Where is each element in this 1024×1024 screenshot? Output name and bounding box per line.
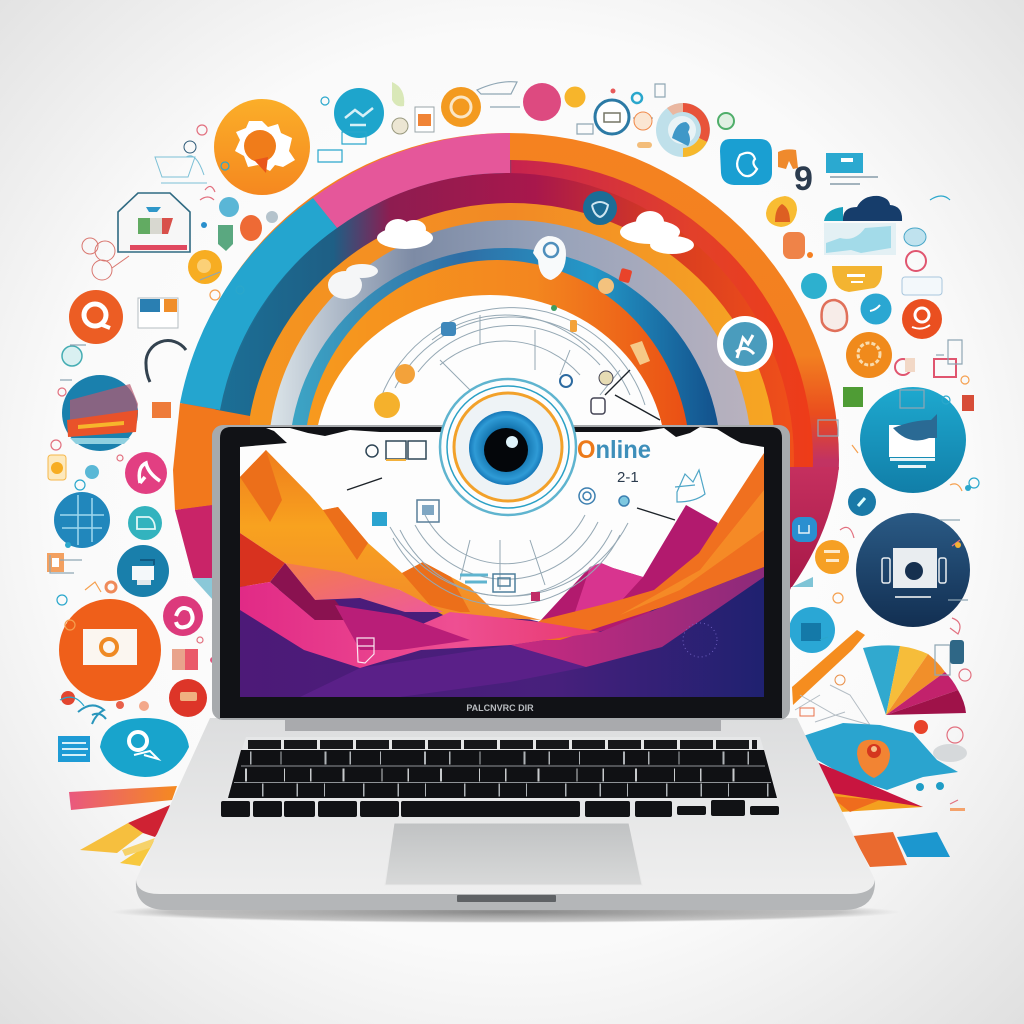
colourful paper strands xyxy=(812,760,923,812)
icon: navy camera badge xyxy=(856,513,970,627)
icon: orange figure xyxy=(766,196,797,227)
icon: yellow small badge xyxy=(564,86,586,108)
icon: orange gear badge xyxy=(846,332,892,378)
icon: orange ring small xyxy=(106,582,116,592)
band: orange right xyxy=(538,453,764,640)
card: cloud and landscape xyxy=(824,196,902,255)
orange paper card xyxy=(853,832,907,867)
icon: yellow small tag xyxy=(48,455,66,480)
band: pink main xyxy=(240,582,600,668)
ring: orange band xyxy=(250,203,774,425)
icon: teal badge xyxy=(128,506,162,540)
icon: pink outline loop xyxy=(822,300,847,331)
ring: inner orange band xyxy=(307,260,687,425)
note: numeric scribble: 2-1 xyxy=(617,469,639,486)
band: light orange right xyxy=(620,490,764,615)
radar: concentric arcs xyxy=(380,308,645,605)
badge: white speech bubble xyxy=(533,236,566,280)
icon: blue rounded badge xyxy=(720,139,772,185)
icon: small document stack xyxy=(172,649,198,670)
icon: pink ring badges xyxy=(895,251,956,377)
radar: dark leader lines xyxy=(347,370,675,520)
icon: open ring xyxy=(146,341,186,382)
blue paper card xyxy=(897,832,950,857)
laptop: keyboard deck xyxy=(136,718,875,894)
card: blue screen xyxy=(826,153,878,184)
ring segment: lower left teal tip xyxy=(193,578,213,600)
ring: outer orange band xyxy=(180,133,839,590)
laptop: front notch xyxy=(457,895,556,902)
icon: red chat badge left xyxy=(69,290,123,344)
laptop: screen bezel xyxy=(220,427,782,718)
icon: large orange mail badge xyxy=(59,599,161,701)
icon: large teal monitor badge xyxy=(860,387,966,493)
badge: teal lens xyxy=(717,316,773,372)
band: magenta shade xyxy=(335,605,470,650)
mountain: pink right peak xyxy=(575,563,643,612)
laptop: hinge xyxy=(285,720,721,731)
sketch: crown icon xyxy=(675,470,705,502)
icon: pale card xyxy=(902,277,942,295)
ring segment: pink xyxy=(313,133,510,228)
icon: pink swirl badge xyxy=(163,596,203,636)
marker: red tag xyxy=(618,268,632,283)
icon: green shield xyxy=(218,225,233,251)
icon: teal chat badge xyxy=(334,88,384,138)
sketch: blue desk drawing xyxy=(155,141,207,183)
clouds and floating ring badges xyxy=(328,191,773,372)
small scattered icons xyxy=(50,82,979,804)
icon: orange frame square xyxy=(47,553,64,572)
laptop: keyboard xyxy=(219,737,784,818)
small filled dots and tags xyxy=(65,82,974,811)
dots: stars on navy xyxy=(683,623,717,657)
icon: orange ring badge xyxy=(441,87,481,127)
ring: grey band xyxy=(270,220,750,425)
radar grid and eye xyxy=(347,305,705,605)
laptop: base underside xyxy=(136,880,875,910)
icon: teal ring small xyxy=(632,93,642,103)
ring segment: right teal tip xyxy=(792,577,813,587)
sketch: red circles xyxy=(82,238,129,280)
icon: blue small badge xyxy=(848,488,876,516)
icon: teal shield xyxy=(801,273,827,299)
band: pink purple lower right xyxy=(511,567,764,667)
paper: yellow sheets xyxy=(80,823,155,866)
icon: teal ring small xyxy=(62,346,82,366)
brush stroke: orange xyxy=(792,630,865,705)
laptop xyxy=(110,425,900,923)
cloud: lower left xyxy=(328,264,378,299)
band: salmon ridge xyxy=(285,563,443,612)
icons: orange fruit xyxy=(374,364,415,418)
sketch: white box on mountain xyxy=(357,638,374,663)
paper: red triangle xyxy=(128,805,170,837)
icon: red target badge xyxy=(902,299,942,339)
eye: iris xyxy=(469,411,543,485)
laptop: brand label: PALCNVRC DIR xyxy=(466,703,534,713)
icon: blue card on paper xyxy=(372,500,439,526)
icon: blue squiggle xyxy=(78,705,106,724)
icon: blue globe badge xyxy=(54,492,110,548)
icon: red small badge xyxy=(61,691,75,705)
eye: blue ring xyxy=(447,386,569,508)
icon: teal dot badge xyxy=(860,294,892,324)
cloud: right xyxy=(620,211,694,254)
mountain: left orange range xyxy=(240,450,541,620)
icon: colourful donut badge xyxy=(656,103,710,157)
ring segment: lower left crimson xyxy=(175,505,213,578)
icon: blue flag card xyxy=(58,736,90,762)
icon: yellow sun xyxy=(188,250,222,284)
paper strip: pink orange xyxy=(69,786,177,810)
ring: white dome xyxy=(318,295,662,425)
ring: dark blue to crimson band xyxy=(284,173,794,467)
marker: cream ball xyxy=(598,278,614,294)
blue splash xyxy=(800,723,958,790)
band: deep purple facet xyxy=(300,645,586,697)
sketch lines near pie xyxy=(795,675,870,725)
icon: green swirl small xyxy=(718,113,734,129)
icon: colour card xyxy=(138,298,178,328)
cloud: left xyxy=(377,219,433,249)
icon: sunset landscape badge xyxy=(62,375,138,451)
ring segment: lower right crimson xyxy=(785,467,839,587)
screen: purple base xyxy=(240,560,764,700)
marker: crimson square xyxy=(531,592,540,601)
icon: orange small square xyxy=(152,402,171,418)
word: Online: Online xyxy=(577,436,651,464)
icon: teal small circle xyxy=(85,465,99,479)
torn white paper edge xyxy=(240,427,764,450)
icon: red pill badge xyxy=(169,679,207,717)
icon: large teal chat badge xyxy=(100,718,189,777)
ring segment: lower left orange xyxy=(173,403,250,510)
grey smudge xyxy=(933,744,967,762)
pie chart xyxy=(863,645,966,715)
ring: crimson inner band xyxy=(215,160,813,467)
icon: blue shield on ring xyxy=(792,517,817,542)
laptop: drop shadow xyxy=(110,901,900,923)
concentric rainbow rings xyxy=(180,133,839,590)
eye: orange ring xyxy=(454,393,562,501)
icon: orange menu badge xyxy=(815,540,849,574)
laptop: screen frame xyxy=(212,425,790,720)
icon: blue outline badge xyxy=(595,100,629,134)
icon: orange shield xyxy=(240,215,262,241)
icon: pink dot badge xyxy=(523,83,561,121)
ring segment: blue xyxy=(180,198,337,410)
icon: green card xyxy=(843,387,863,407)
icon: yellow speech card xyxy=(832,266,882,292)
eye: highlight xyxy=(506,436,518,448)
icon row: cards left of eye xyxy=(366,441,426,460)
icon: card at bottom of radar xyxy=(460,574,515,592)
icon: blue brain xyxy=(904,228,926,246)
icon: teal cube badge xyxy=(789,607,835,653)
ring: blue band xyxy=(292,248,718,425)
mountain: dark magenta right xyxy=(541,505,718,640)
icon: orange document xyxy=(783,232,805,259)
icon: blue badge xyxy=(219,197,239,217)
icon: document house card xyxy=(118,193,190,252)
mountain: dark orange facets xyxy=(240,450,470,612)
icon: orange sun badge xyxy=(214,99,310,195)
icon: orange tag xyxy=(778,149,798,169)
icon: spiral badge xyxy=(579,488,629,506)
icon: orange map pin xyxy=(857,740,890,778)
numeral nine: 9 xyxy=(794,160,813,198)
band: crimson shade xyxy=(270,563,350,620)
icons: small badges on arcs xyxy=(441,305,650,414)
icon: blue printer badge xyxy=(117,545,169,597)
laptop: trackpad xyxy=(385,823,642,885)
band: red left xyxy=(240,533,285,587)
laptop screen artwork xyxy=(240,440,764,700)
eye: pupil xyxy=(484,428,528,472)
badge: navy shield xyxy=(583,191,617,225)
eye: outer teal ring xyxy=(440,379,576,515)
screen: white sky xyxy=(240,450,764,622)
icon: pink arrow badge xyxy=(125,452,167,494)
